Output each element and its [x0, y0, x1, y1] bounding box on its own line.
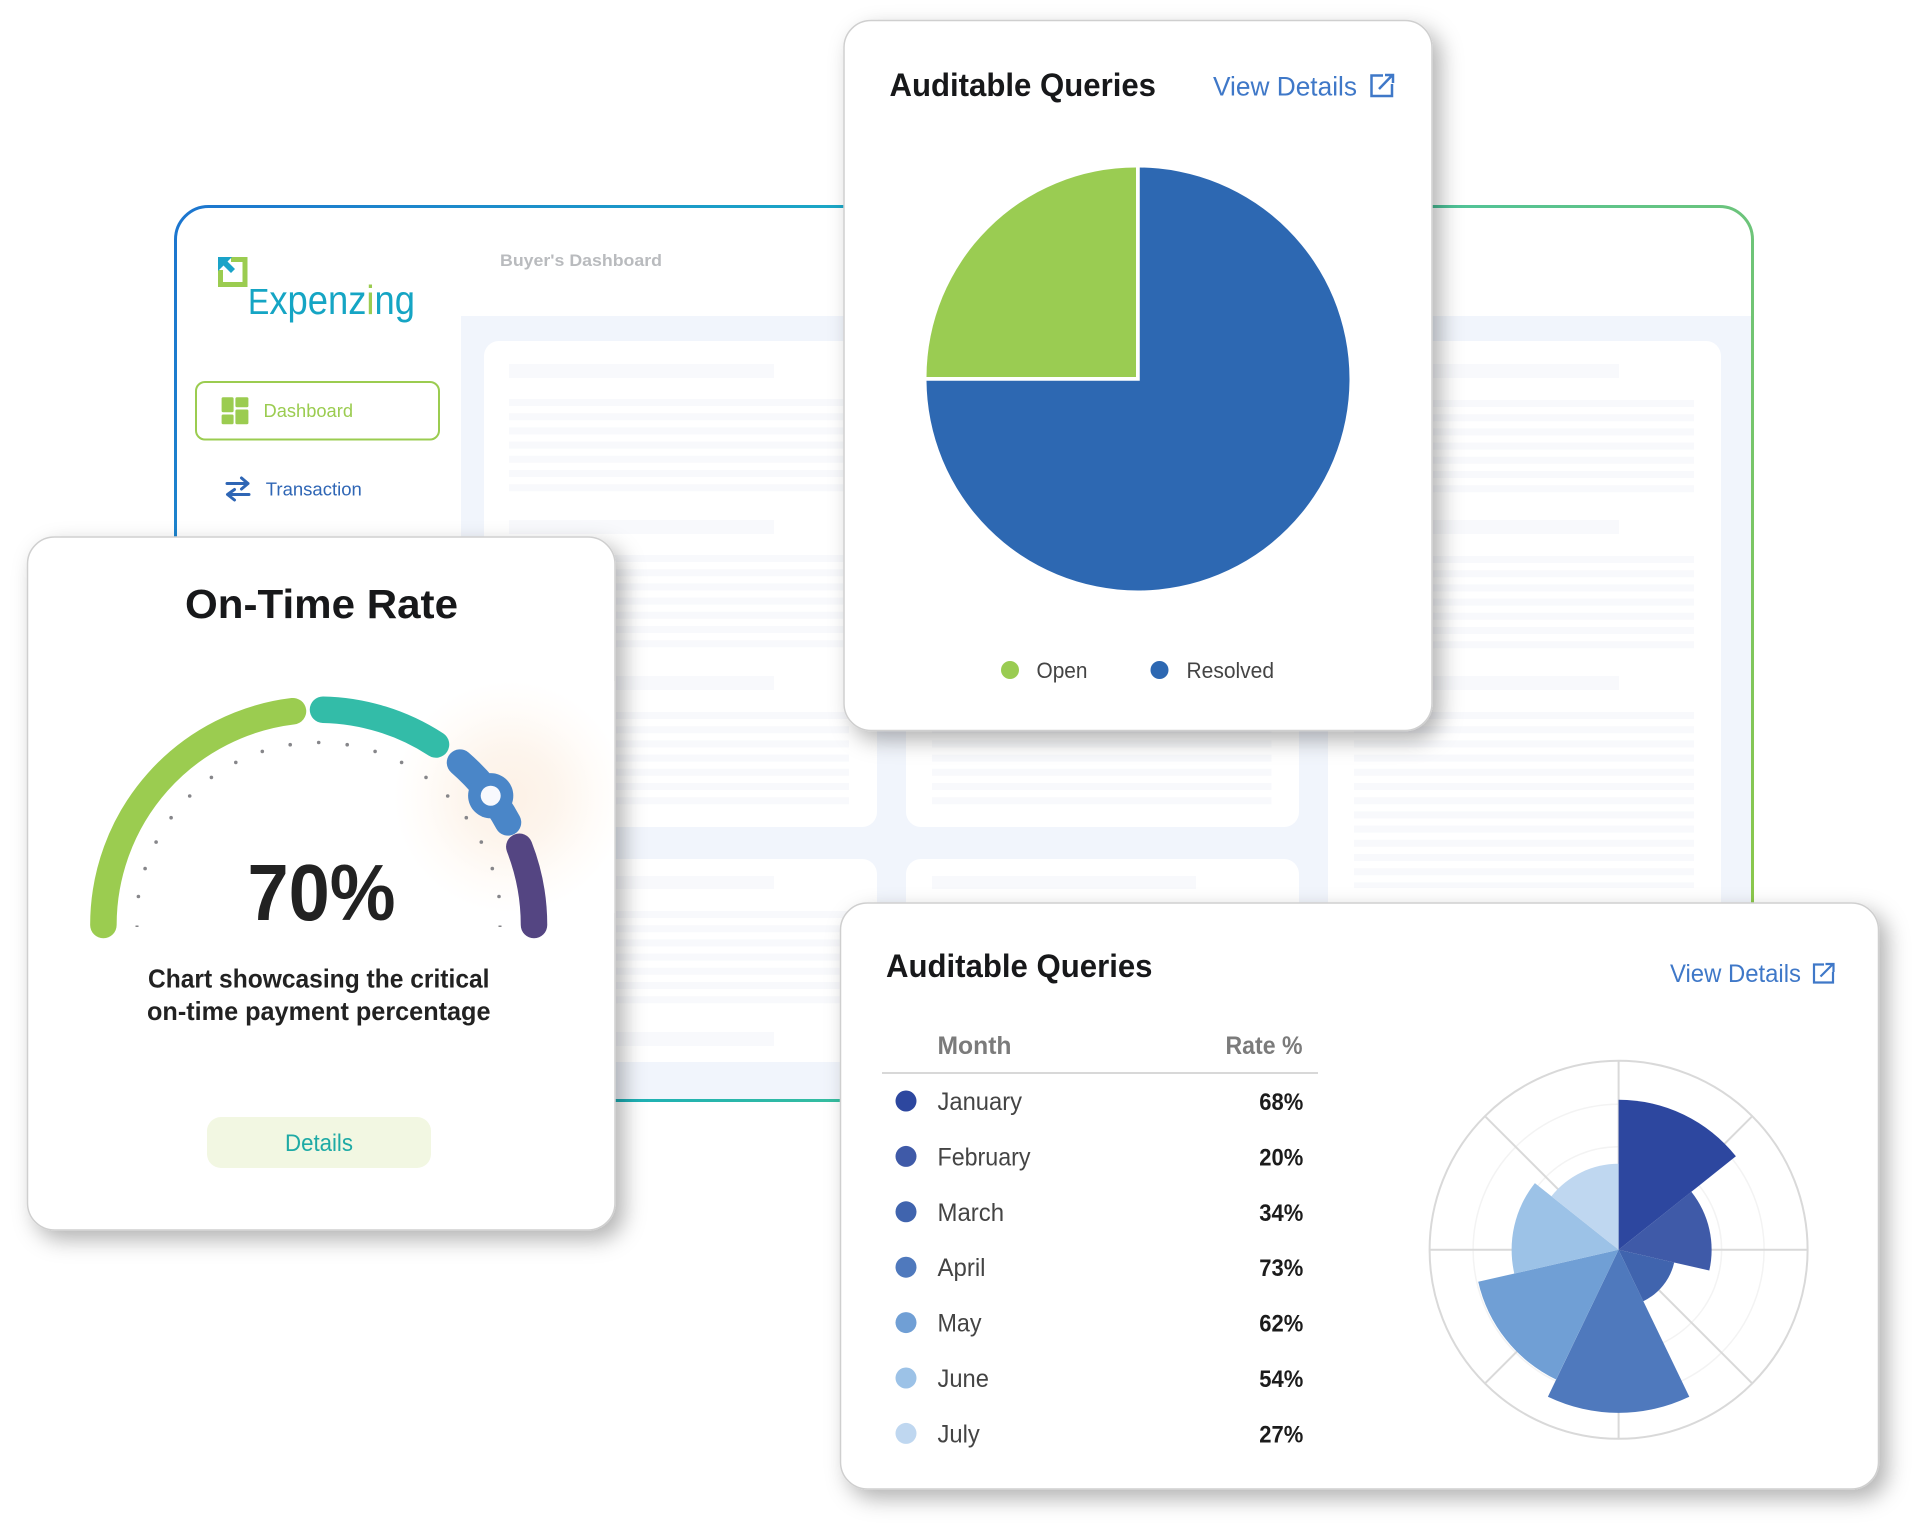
row: May: 62% — [1259, 1311, 1303, 1338]
heading: On-Time Rate — [185, 581, 458, 627]
icon: transfer arrows — [227, 478, 249, 500]
row: March: 34% — [1259, 1200, 1303, 1227]
sector: March — [1619, 1250, 1674, 1301]
table header — [938, 1032, 1302, 1060]
link: View Details: View Details — [1670, 960, 1801, 988]
row: January: 68% — [1259, 1089, 1303, 1116]
row: May — [896, 1310, 1303, 1338]
row: February: 20% — [1259, 1144, 1303, 1171]
gauge knob — [468, 773, 513, 818]
row: April — [896, 1254, 1303, 1282]
row: June: June — [938, 1365, 989, 1393]
row: May: May — [938, 1310, 982, 1338]
row: July: July — [938, 1420, 980, 1448]
description — [147, 964, 490, 1026]
heading: Auditable Queries — [886, 948, 1152, 984]
heading: Buyer's Dashboard: Buyer's Dashboard — [500, 251, 662, 270]
nav item: Dashboard — [196, 382, 439, 440]
icon: external link — [1372, 75, 1393, 96]
sector: April — [1548, 1250, 1689, 1413]
gauge — [103, 710, 534, 927]
content background — [461, 316, 1753, 1102]
button: Details — [207, 1117, 431, 1168]
row: June — [896, 1365, 1303, 1393]
skeleton panels — [484, 341, 1721, 1062]
logo: Expenzing — [218, 257, 415, 323]
description: on-time payment percentage — [147, 996, 490, 1026]
table header: Rate % — [1226, 1032, 1302, 1060]
table header: Month — [938, 1032, 1012, 1060]
slice: Resolved — [926, 168, 1350, 590]
label: Transaction: Transaction — [266, 480, 362, 500]
arc segments — [103, 710, 534, 925]
row: February — [896, 1143, 1303, 1171]
sector: January — [1619, 1100, 1736, 1250]
description: Chart showcasing the critical — [148, 964, 490, 994]
link: View Details: View Details — [1213, 72, 1357, 102]
row: July: 27% — [1259, 1421, 1303, 1448]
logo wordmark: Expenzing — [248, 277, 415, 323]
sector: February — [1619, 1192, 1712, 1270]
row: July — [896, 1420, 1303, 1448]
heading: Auditable Queries — [890, 67, 1156, 103]
tick dots — [136, 741, 502, 927]
row: April: 73% — [1259, 1255, 1303, 1282]
pie chart — [926, 168, 1350, 590]
row: March — [896, 1199, 1303, 1227]
legend: Open — [1036, 658, 1088, 683]
slice: Open — [926, 168, 1136, 377]
dashboard frame — [176, 206, 1753, 1102]
row: June: 54% — [1259, 1366, 1303, 1393]
table — [882, 1032, 1318, 1448]
glow — [394, 681, 614, 913]
panel: auditable queries table and polar chart — [840, 903, 1878, 1489]
nav item: Transaction — [227, 478, 362, 500]
logo icon — [218, 257, 245, 284]
sector: May — [1478, 1250, 1619, 1380]
panel: auditable queries pie — [844, 20, 1432, 730]
panel: on-time rate — [28, 537, 615, 1230]
value: 70% — [248, 848, 396, 937]
legend: Resolved — [1186, 658, 1274, 683]
legend — [1001, 658, 1274, 683]
row: April: April — [938, 1254, 986, 1282]
row: January: January — [938, 1088, 1022, 1116]
sector: July — [1551, 1164, 1619, 1250]
row: March: March — [938, 1199, 1004, 1227]
icon: dashboard grid — [222, 397, 248, 424]
sector: June — [1512, 1183, 1619, 1274]
skeleton bars — [509, 364, 1619, 1046]
label: Dashboard: Dashboard — [264, 401, 353, 421]
row: February: February — [938, 1143, 1031, 1171]
row: January — [896, 1088, 1303, 1116]
icon: external link — [1814, 964, 1834, 982]
polar chart — [1430, 1061, 1808, 1439]
button: Details: Details — [285, 1130, 353, 1157]
